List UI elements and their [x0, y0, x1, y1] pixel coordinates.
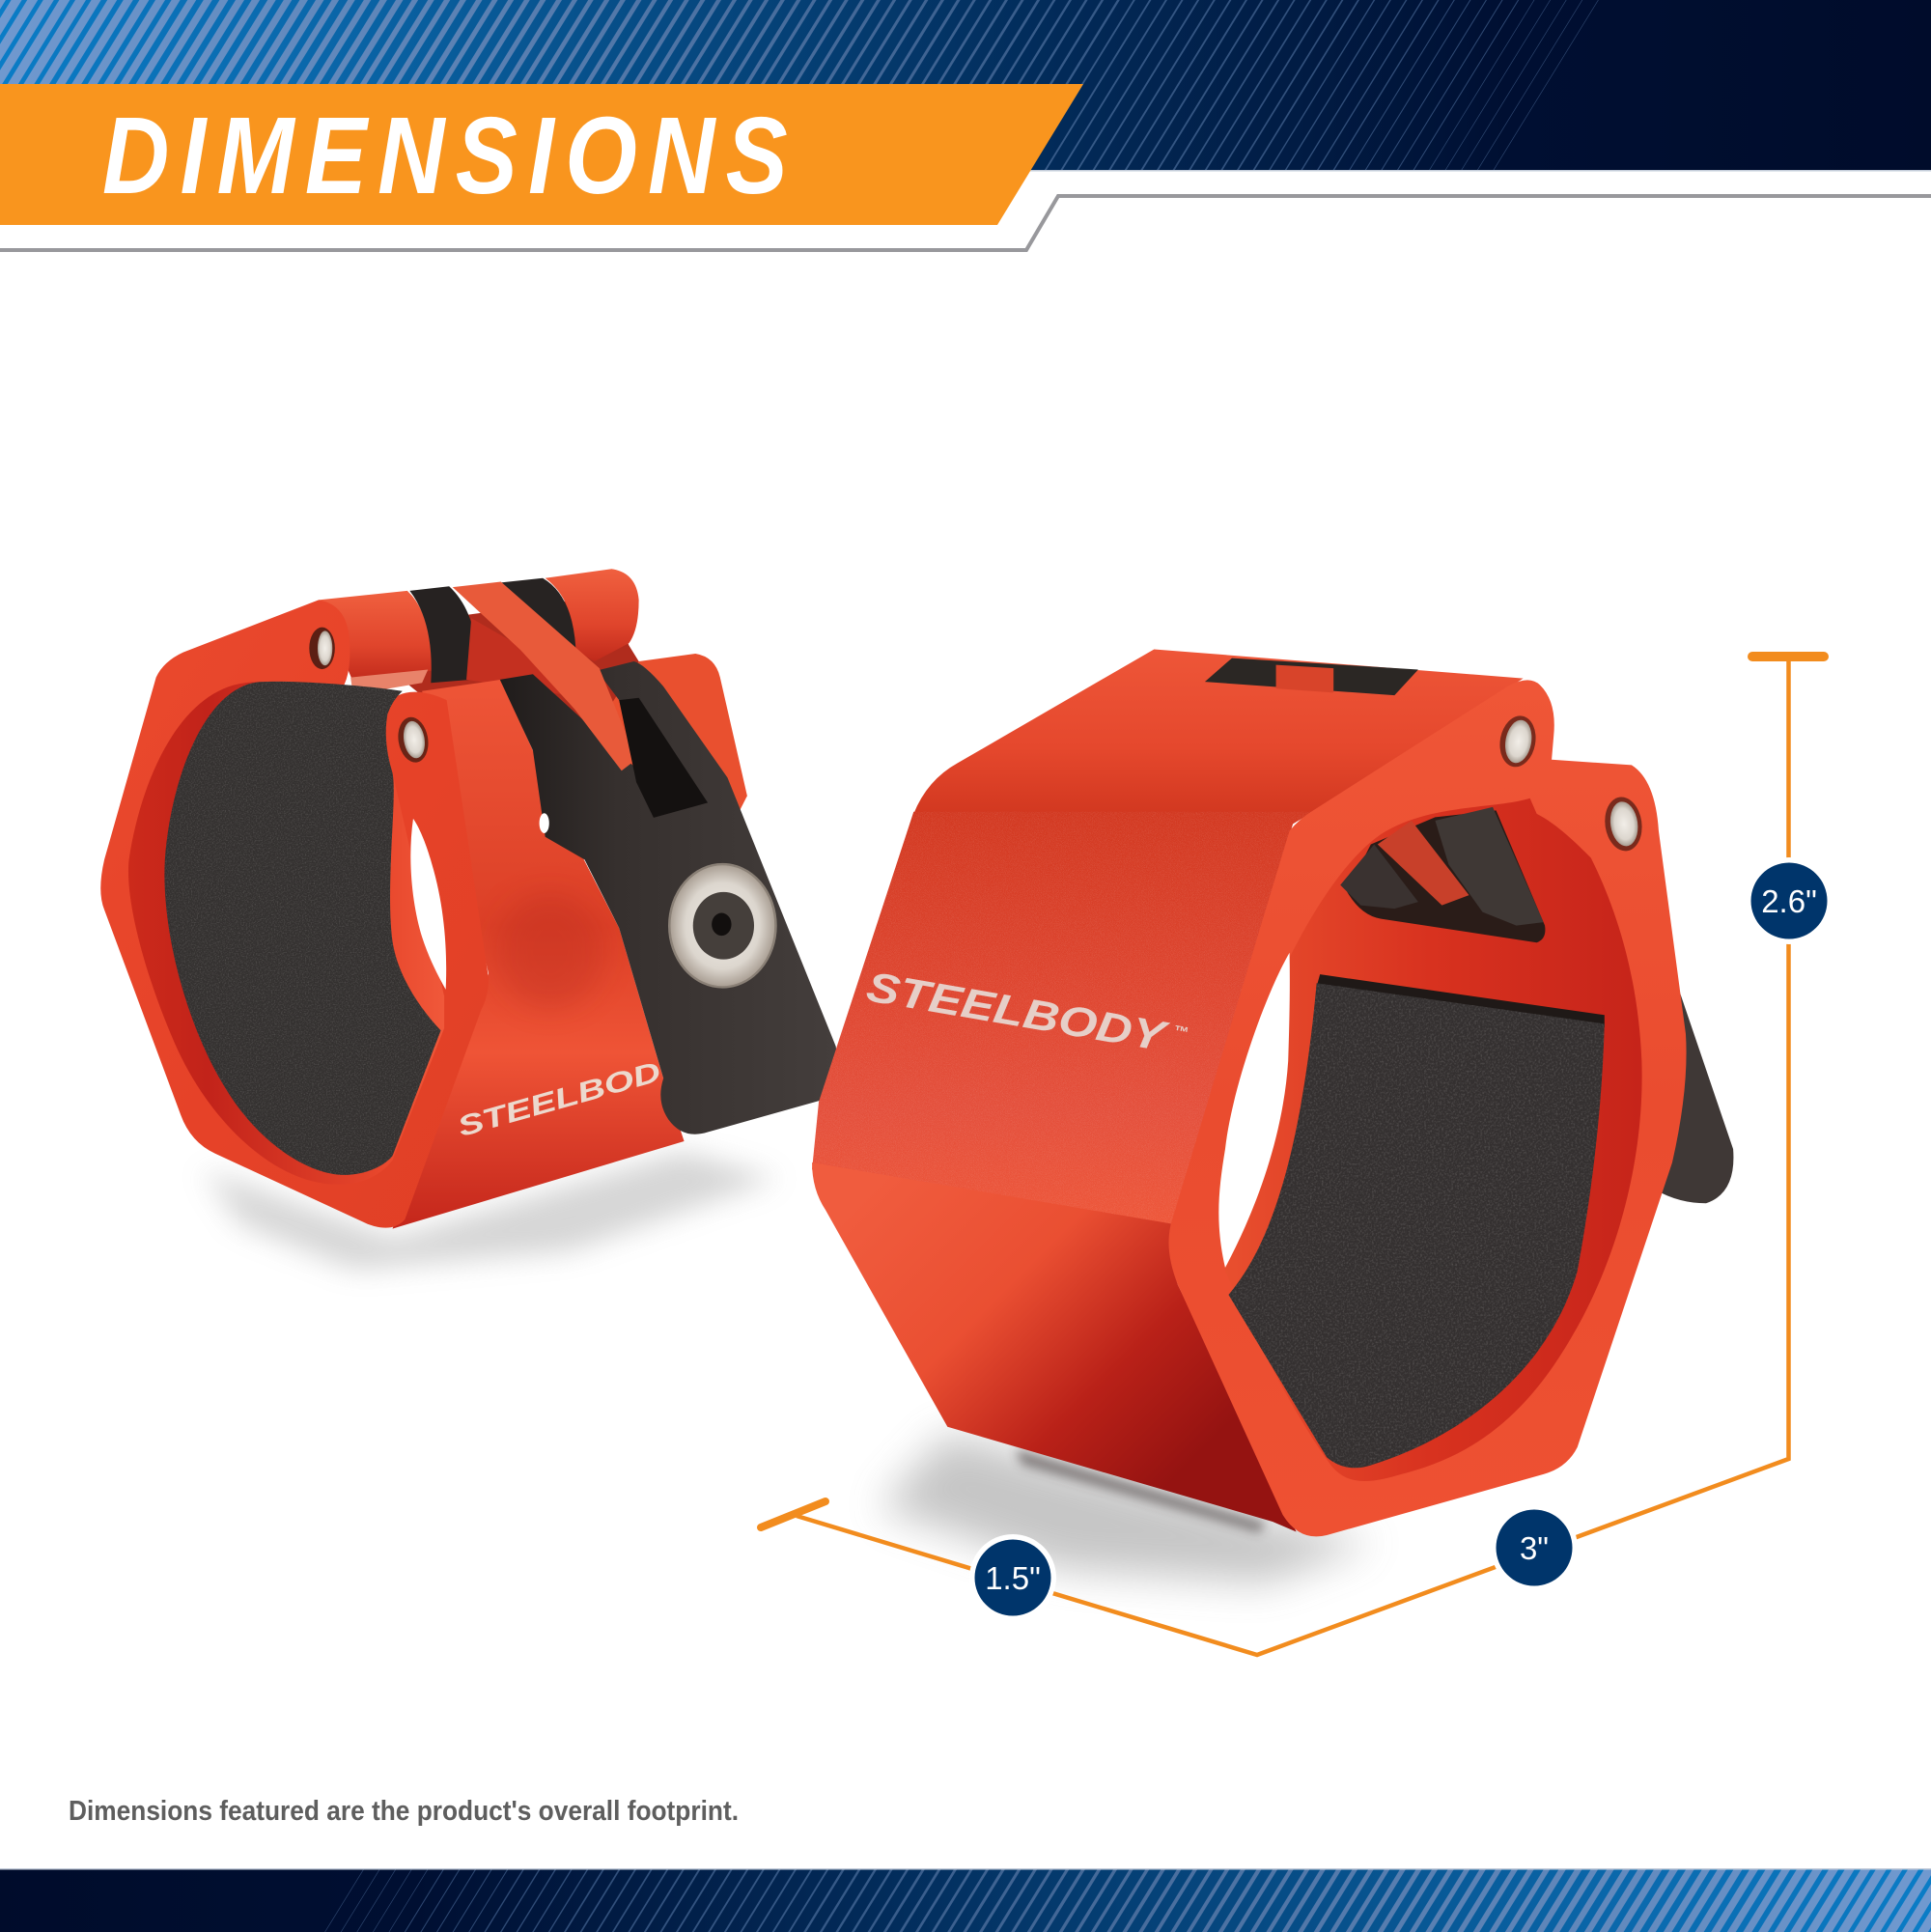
width callout 3 inches: 3" [1520, 1530, 1549, 1566]
see-through gap [1218, 953, 1290, 1268]
inner slot with lever [1340, 807, 1545, 942]
dimension lines [761, 657, 1824, 1655]
header band with diagonal stripes [0, 0, 1931, 172]
footer band with diagonal stripes [0, 1868, 1931, 1932]
STEELBODY wordmark right: ™ [1172, 1022, 1189, 1042]
hinge cylinder [319, 591, 432, 682]
inner wall [128, 682, 444, 1185]
width callout 3 inches [1491, 1504, 1578, 1591]
black rubber pad [164, 682, 441, 1175]
pin top [1496, 713, 1540, 770]
STEELBODY wordmark left: STEELBODY [454, 1048, 693, 1143]
depth callout 1.5 inches: 1.5" [985, 1560, 1041, 1596]
black rubber pad [1228, 974, 1605, 1468]
rear lever tip [1655, 980, 1733, 1203]
black roller right [501, 578, 575, 650]
middle facet [812, 812, 1313, 1230]
STEELBODY wordmark right: STEELBODY [863, 964, 1172, 1061]
top facet [913, 649, 1524, 814]
height callout 2.6 inches: 2.6" [1761, 883, 1817, 919]
pin right [395, 715, 432, 765]
black lever [500, 661, 837, 1134]
lever slot [619, 698, 708, 818]
front ring [100, 600, 489, 1228]
rear body [570, 654, 747, 951]
title: DIMENSIONS [102, 96, 788, 217]
inner wall [1218, 798, 1642, 1481]
top cap [1752, 652, 1824, 661]
lever screw [669, 864, 775, 987]
height callout 2.6 inches [1746, 857, 1833, 944]
side body [393, 680, 685, 1229]
left collar product photo [100, 569, 837, 1270]
pin side [1602, 795, 1645, 854]
lower facet [812, 1162, 1297, 1532]
end hinge cylinder [546, 569, 639, 661]
ground shadow right collar [880, 1434, 1374, 1582]
grey rule under header [0, 196, 1931, 250]
footnote: Dimensions featured are the product's overall footprint. [69, 1796, 739, 1827]
ground shadow left collar [206, 1151, 776, 1270]
pin left [309, 628, 335, 669]
black roller left [409, 586, 477, 683]
see-through gap [410, 819, 446, 990]
right collar product photo [812, 649, 1733, 1582]
front ring [1169, 680, 1687, 1536]
depth callout 1.5 inches [969, 1534, 1056, 1621]
top window with rollers [1205, 658, 1418, 695]
title banner [0, 84, 1083, 225]
red strap [453, 581, 636, 770]
left cap [761, 1501, 826, 1527]
hinge backing [344, 596, 740, 796]
